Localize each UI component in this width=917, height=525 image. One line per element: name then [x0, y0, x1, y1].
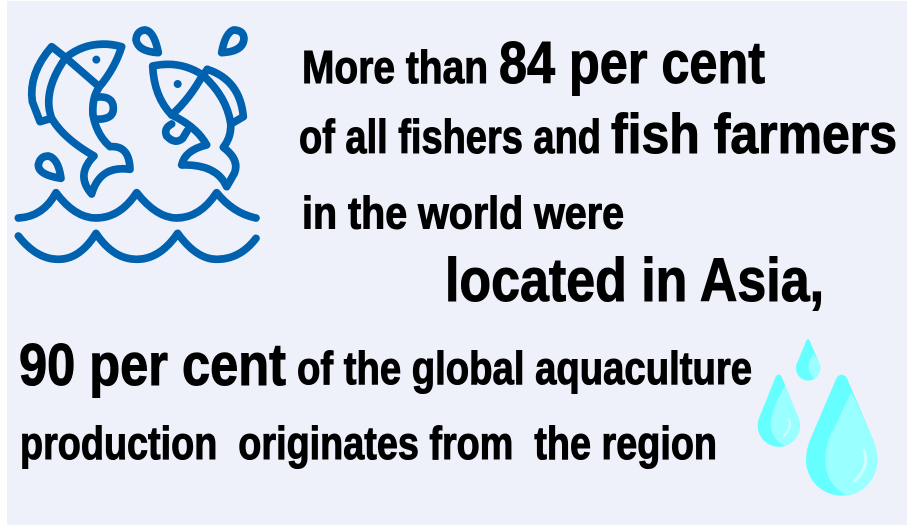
icon: water drops: [758, 339, 877, 496]
text: 90 per cent of the global aquaculture: [19, 332, 752, 398]
right fish: [153, 64, 243, 187]
text: more than 84 per cent: [302, 30, 765, 96]
large drop: [806, 375, 877, 496]
text: of all fishers and fish farmers: of all fishers and: [299, 110, 601, 163]
text: in the world were: in the world were: [302, 188, 624, 238]
icon: fish jumping out of waves: [18, 30, 256, 259]
text: more than 84 per cent: More than: [302, 41, 488, 93]
medium drop: [758, 374, 800, 447]
left fish: [32, 44, 130, 194]
text: 90 per cent of the global aquaculture: of the global aquaculture: [297, 342, 752, 394]
text: production originates from the region: production originates from the region: [20, 417, 717, 469]
text: located in Asia: located in Asia,: [445, 246, 824, 314]
text: more than 84 per cent: 84 per cent: [499, 30, 765, 96]
text: of all fishers and fish farmers: [299, 102, 897, 165]
lower wave: [18, 233, 256, 259]
splash droplets: [38, 30, 244, 178]
text: 90 per cent of the global aquaculture: 90 per cent: [19, 332, 286, 398]
upper wave: [18, 193, 256, 218]
small drop: [796, 339, 820, 380]
